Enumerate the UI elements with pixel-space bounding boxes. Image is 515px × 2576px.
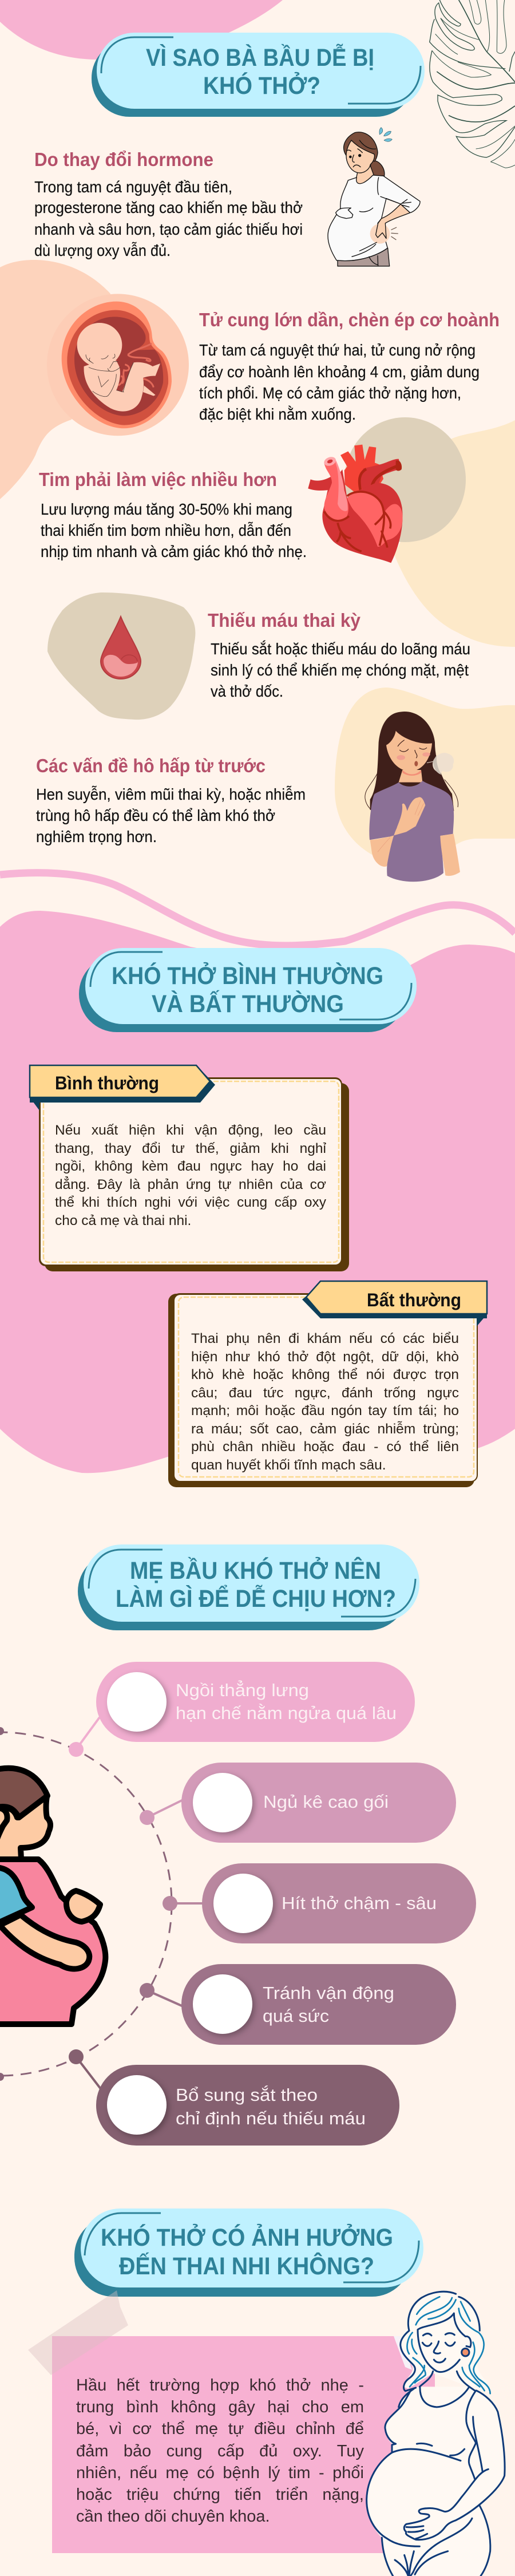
step 1: sit upright (96, 1662, 415, 1742)
cause 2: enlarged uterus: đẩy cơ hoành lên khoảng 4 cm, giảm dung (199, 363, 480, 381)
diagram: dashed arc connectors (0, 1717, 203, 2089)
panel: abnormal shortness of breath: phù chân nhiều hoặc đau - có thể liên (191, 1439, 459, 1455)
step 3: slow deep breathing: Hít thở chậm - sâu (282, 1893, 437, 1913)
icon: pregnant mother (0, 1768, 105, 2024)
step 2: raised pillow: Ngủ kê cao gối (263, 1792, 389, 1812)
panel: pink note with tape: trung bình không gây hại cho em (76, 2398, 364, 2416)
heading: normal and abnormal: VÀ BẤT THƯỜNG (152, 990, 344, 1018)
cause 4: anemia: Thiếu máu thai kỳ (208, 610, 361, 631)
panel: normal shortness of breath: cho cả mẹ và thai nhi. (55, 1212, 191, 1228)
background: large pink section blob (0, 911, 515, 1473)
panel: abnormal shortness of breath: khò khè hoặc không thể nói được trọn (191, 1367, 459, 1382)
cause 5: respiratory conditions: Hen suyễn, viêm mũi thai kỳ, hoặc nhiễm (36, 785, 306, 803)
panel: pink note with tape: cần theo dõi chuyên khoa. (76, 2507, 270, 2526)
panel: normal shortness of breath (30, 1065, 349, 1271)
panel: normal shortness of breath: ngồi, không kèm đau ngực hay ho dai (55, 1159, 326, 1174)
panel: pink note with tape: bé, vì cơ thể mẹ tự điều chỉnh để (76, 2420, 364, 2438)
step 1: sit upright: Ngồi thẳng lưng (176, 1680, 309, 1700)
step 5: iron supplement: Bổ sung sắt theo (176, 2085, 318, 2105)
panel: abnormal shortness of breath: câu; đau tức ngực, đánh trống ngực (191, 1385, 459, 1400)
heading: why pregnant women get short of breath: KHÓ THỞ? (203, 72, 320, 100)
panel: normal shortness of breath: Bình thường (55, 1073, 159, 1093)
panel: abnormal shortness of breath: Thai phụ nên đi khám nếu có các biểu (191, 1331, 459, 1346)
cause 3: heart works harder: thai khiến tim bơm nhiều hơn, dẫn đến (41, 521, 291, 539)
decorative leaf (430, 0, 515, 168)
heading: what to do (78, 1544, 419, 1630)
background: yellow blob right (394, 420, 515, 647)
cause 4: anemia: Thiếu sắt hoặc thiếu máu do loãng máu (211, 640, 470, 658)
cause 5: respiratory conditions: Các vấn đề hô hấp từ trước (36, 755, 266, 776)
panel: abnormal shortness of breath: quan huyết khối tĩnh mạch sâu. (191, 1457, 386, 1472)
background: peach blob (0, 260, 110, 499)
panel: abnormal shortness of breath: mạnh; môi hoặc đầu ngón tay tím tái; ho (191, 1403, 459, 1419)
panel: abnormal shortness of breath: ra máu; sốt cao, cảm giác nhiễm trùng; (191, 1421, 459, 1437)
panel: normal shortness of breath: dẳng. Đây là phản ứng tự nhiên của cơ (55, 1177, 326, 1192)
cause 2: enlarged uterus: đặc biệt khi nằm xuống. (199, 405, 356, 423)
cause 3: heart works harder: Lưu lượng máu tăng 30-50% khi mang (41, 500, 292, 518)
step 3: slow deep breathing (202, 1863, 476, 1943)
cause 1: hormone: progesterone tăng cao khiến mẹ bầu thở (34, 199, 303, 216)
cause 4: anemia: sinh lý có thể khiến mẹ chóng mặt, mệt (211, 661, 469, 679)
cause 2: enlarged uterus: Tử cung lớn dần, chèn ép cơ hoành (199, 309, 500, 330)
panel: abnormal shortness of breath (168, 1281, 487, 1487)
cause 2: enlarged uterus (199, 309, 500, 423)
heading: what to do: LÀM GÌ ĐỂ DỄ CHỊU HƠN? (116, 1585, 396, 1613)
icon: anatomical heart (308, 445, 403, 563)
cause 2: enlarged uterus: tích phổi. Mẹ có cảm giác thở nặng hơn, (199, 384, 461, 402)
step 5: iron supplement: chỉ định nếu thiếu máu (176, 2108, 366, 2128)
cause 1: hormone: Do thay đổi hormone (34, 149, 213, 170)
cause 5: respiratory conditions: trùng hô hấp đều có thể làm khó thở (36, 807, 275, 824)
panel: abnormal shortness of breath: Bất thường (367, 1290, 461, 1310)
cause 5: respiratory conditions (36, 755, 306, 846)
heading: effect on the fetus: ĐẾN THAI NHI KHÔNG? (119, 2252, 374, 2280)
panel: normal shortness of breath: Nếu xuất hiện khi vận động, leo cầu (55, 1123, 326, 1138)
heading: effect on the fetus (74, 2208, 423, 2297)
cause 5: respiratory conditions: nghiêm trọng hơn. (36, 828, 157, 846)
heading: why pregnant women get short of breath (92, 33, 425, 117)
panel: pink note with tape: hoặc triệu chứng tiến triển nặng, (76, 2486, 364, 2504)
panel: abnormal shortness of breath: hiện như khó thở đột ngột, dữ dội, khò (191, 1349, 459, 1365)
cause 3: heart works harder: nhịp tim nhanh và cảm giác khó thở nhẹ. (41, 543, 307, 560)
panel: pink note with tape: đảm bảo cung cấp đủ oxy. Tuy (76, 2442, 364, 2460)
step 1: sit upright: hạn chế nằm ngửa quá lâu (176, 1703, 397, 1723)
step 2: raised pillow (181, 1763, 456, 1843)
illustration: line-art pregnant woman (367, 2291, 505, 2576)
panel: normal shortness of breath: thang, thay đổi tư thế, giảm khi nghỉ (55, 1140, 326, 1156)
icon: worried pregnant woman (328, 128, 420, 266)
step 5: iron supplement (96, 2065, 399, 2146)
background: yellow blob behind woman (335, 688, 515, 859)
cause 2: enlarged uterus: Từ tam cá nguyệt thứ hai, tử cung nở rộng (199, 341, 476, 359)
background: pink blob top left (0, 0, 283, 60)
step 4: avoid overexertion (181, 1964, 456, 2045)
icon: woman breathing with hand on chest (365, 712, 460, 882)
panel: normal shortness of breath: thể khi thích nghi với việc cung cấp oxy (55, 1195, 326, 1210)
step 4: avoid overexertion: Tránh vận động (263, 1983, 394, 2003)
cause 1: hormone: Trong tam cá nguyệt đầu tiên, (34, 178, 232, 196)
step 4: avoid overexertion: quá sức (263, 2006, 329, 2026)
cause 1: hormone (34, 149, 303, 259)
heading: what to do: MẸ BẦU KHÓ THỞ NÊN (130, 1556, 381, 1585)
cause 3: heart works harder (39, 469, 307, 560)
panel: pink note with tape: nhiên, nếu mẹ có bệnh lý tim - phổi (76, 2464, 364, 2482)
panel: pink note with tape (28, 2290, 435, 2553)
heading: normal and abnormal: KHÓ THỞ BÌNH THƯỜNG (112, 962, 383, 990)
icon: fetus in the womb (47, 294, 189, 436)
heading: why pregnant women get short of breath: VÌ SAO BÀ BẦU DỄ BỊ (146, 44, 374, 72)
background: tan circle behind heart (344, 417, 466, 542)
background: pink wave ribbon (0, 873, 515, 946)
heading: effect on the fetus: KHÓ THỞ CÓ ẢNH HƯỞNG (101, 2223, 393, 2251)
heading: normal and abnormal (79, 948, 417, 1032)
cause 4: anemia: và thở dốc. (211, 682, 283, 700)
cause 1: hormone: nhanh và sâu hơn, tạo cảm giác thiếu hơi (34, 220, 303, 238)
cause 1: hormone: dù lượng oxy vẫn đủ. (34, 242, 171, 259)
panel: pink note with tape: Hầu hết trường hợp khó thở nhẹ - (76, 2376, 364, 2395)
cause 3: heart works harder: Tim phải làm việc nhiều hơn (39, 469, 277, 490)
icon: blood drop on tan blob (47, 592, 195, 720)
cause 4: anemia (208, 610, 470, 700)
